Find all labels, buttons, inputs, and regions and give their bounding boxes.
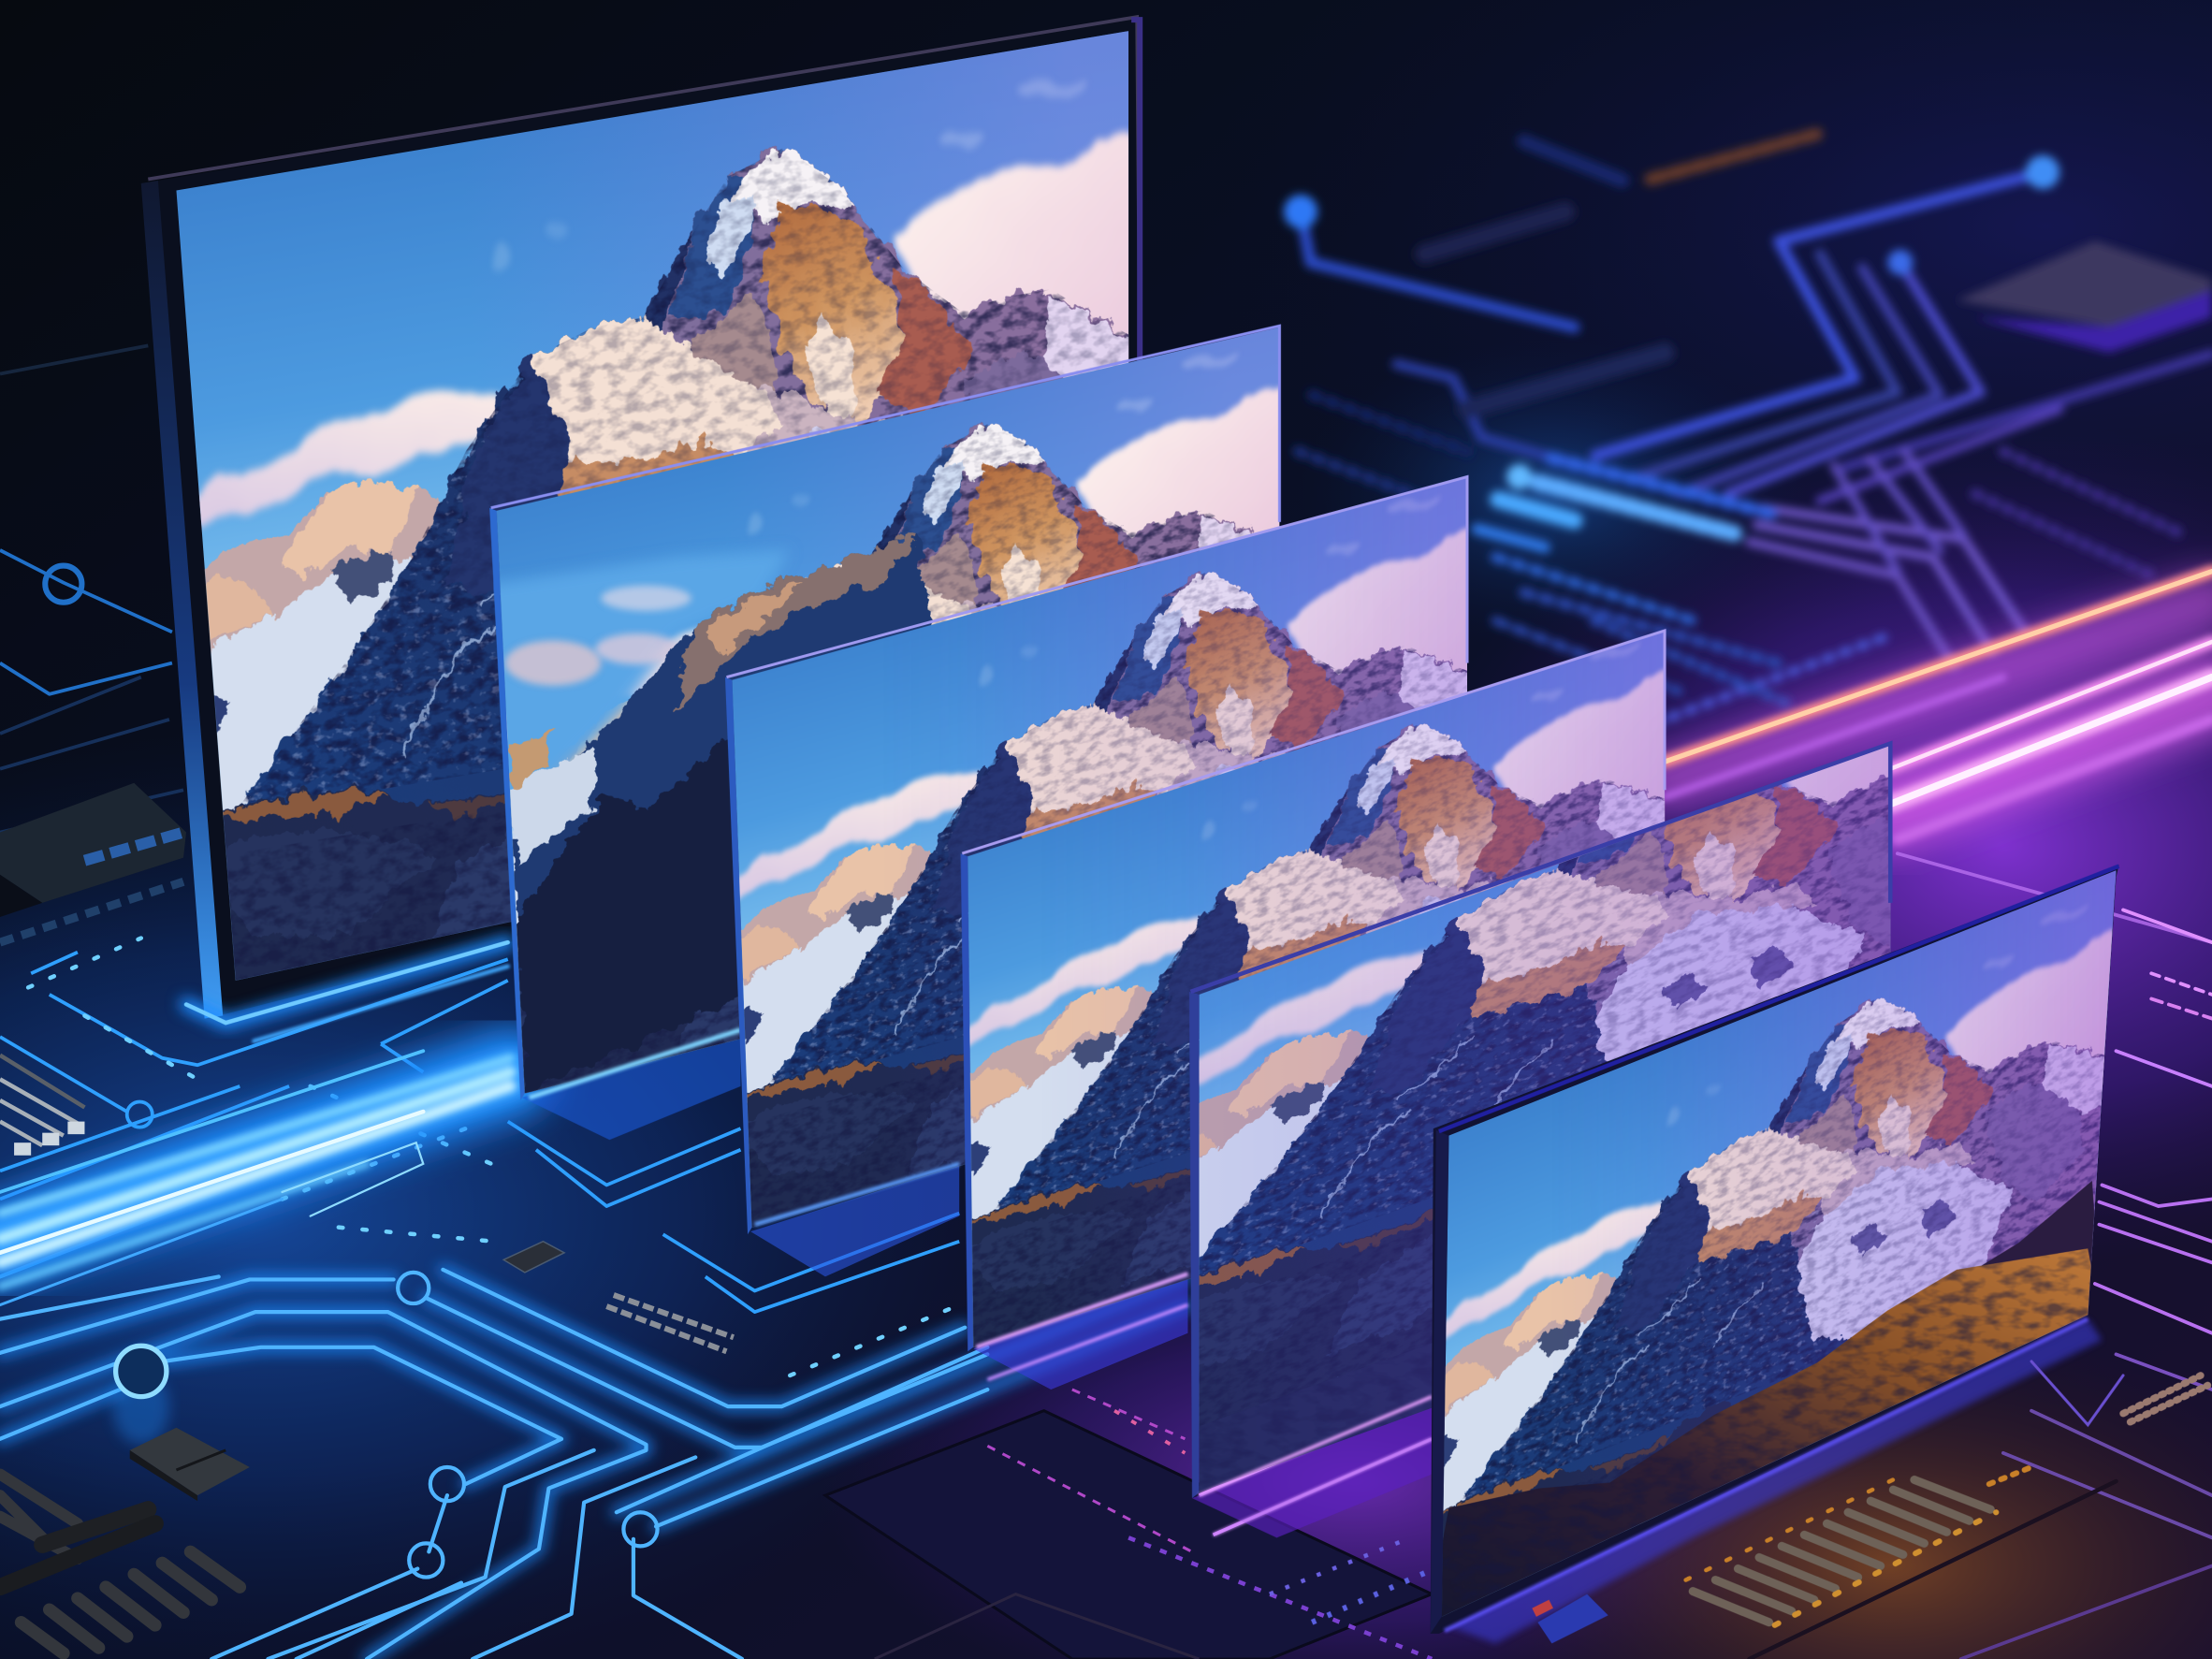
background: blurred out-of-focus traces at top right: [1284, 134, 2212, 755]
mountain flank: wider left slope: [511, 536, 945, 1093]
panel 3: third screen: [725, 475, 1469, 1276]
circuit traces: left side lines and node: [0, 345, 183, 833]
circuit traces: blue main routes at lower left: [0, 939, 1187, 1659]
connector comb: gold pins under front screen: [1686, 1361, 2207, 1625]
panel 5: fifth screen: [1136, 545, 2035, 1537]
chip: small component: [130, 1428, 250, 1501]
bottom right board: dark plate and traces: [825, 1390, 1432, 1659]
panel 1: largest screen: [141, 0, 1240, 1044]
chip: dark component at left: [0, 783, 186, 942]
light beam: right side pink and orange streams: [1665, 572, 2212, 839]
chip: tiny component near centre: [503, 1242, 564, 1273]
connector comb: bottom left pads: [0, 1474, 240, 1653]
connector pins: upper left: [0, 1055, 84, 1156]
contact pads: centre: [606, 1295, 734, 1351]
panel 6: smallest front screen: [1425, 837, 2154, 1655]
circuit traces: right edge purple lines: [1749, 853, 2212, 1659]
blue glints: pads at front screen base: [1270, 1537, 1608, 1643]
panel 2: second screen: [489, 324, 1282, 1140]
foreground ridge: orange sunlit slope: [1975, 1181, 2102, 1326]
light beam: left blue stream: [0, 1051, 511, 1305]
sky patch: scattered low clouds: [500, 550, 784, 838]
panel 4: fourth screen: [955, 577, 1714, 1390]
